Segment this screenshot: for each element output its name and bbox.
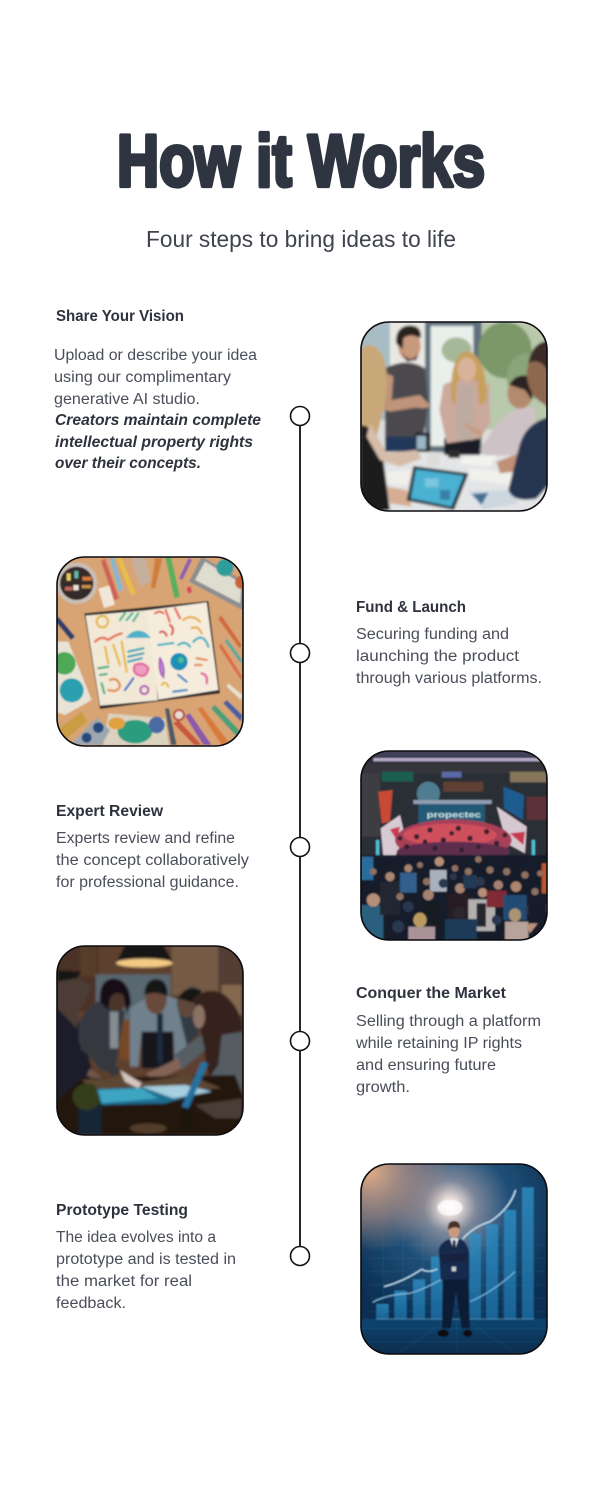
- description: conquer the market: and ensuring future: [356, 1057, 496, 1074]
- description: share your vision: Upload or describe your idea: [54, 347, 257, 364]
- description: conquer the market: [355, 1013, 541, 1096]
- photo: crowd at a product launch event: propectec: [427, 809, 481, 819]
- description: prototype testing: The idea evolves into a: [56, 1229, 216, 1246]
- description: fund and launch: Securing funding and: [356, 626, 509, 643]
- description: prototype testing: the market for real: [56, 1273, 192, 1290]
- description: fund and launch: through various platforms.: [356, 670, 542, 687]
- timeline node 5: [290, 1246, 310, 1266]
- description: expert review: for professional guidance.: [56, 874, 239, 891]
- description: share your vision: over their concepts.: [55, 455, 201, 472]
- description: conquer the market: Selling through a platform: [356, 1013, 541, 1030]
- description: prototype testing: prototype and is tested in: [56, 1251, 236, 1268]
- description: prototype testing: [56, 1229, 236, 1312]
- text block: expert review: [56, 803, 249, 891]
- timeline: [290, 406, 310, 1266]
- description: fund and launch: [356, 626, 542, 687]
- description: conquer the market: while retaining IP rights: [355, 1035, 522, 1052]
- description: share your vision: Creators maintain complete: [55, 412, 261, 429]
- heading: prototype testing: Prototype Testing: [56, 1202, 188, 1219]
- description: conquer the market: growth.: [356, 1079, 410, 1096]
- text block: conquer the market: [355, 985, 541, 1096]
- timeline node 3: [290, 838, 310, 856]
- description: expert review: the concept collaboratively: [56, 852, 249, 869]
- text block: share your vision: [54, 308, 261, 472]
- photo: crowd at a product launch event: [360, 750, 548, 941]
- subtitle: Four steps to bring ideas to life: [146, 226, 456, 252]
- description: fund and launch: launching the product: [356, 648, 520, 665]
- timeline node 4: [290, 1032, 310, 1050]
- description: share your vision: [54, 347, 261, 472]
- title: How it Works: [117, 121, 485, 202]
- heading: fund and launch: Fund & Launch: [356, 599, 466, 616]
- description: share your vision: generative AI studio.: [54, 391, 200, 408]
- heading: conquer the market: Conquer the Market: [356, 985, 507, 1002]
- description: expert review: Experts review and refine: [56, 830, 235, 847]
- text block: fund and launch: [356, 599, 542, 687]
- photo: team meeting around a table: [360, 321, 548, 512]
- photo: open sketchbook with art supplies: [56, 556, 244, 747]
- description: expert review: [56, 830, 249, 891]
- heading: share your vision: Share Your Vision: [56, 308, 184, 325]
- text block: prototype testing: [56, 1202, 236, 1312]
- timeline node 2: [290, 644, 310, 662]
- photo: team working over a touch table: [56, 945, 244, 1136]
- heading: expert review: Expert Review: [56, 803, 164, 820]
- description: share your vision: using our complimentary: [54, 369, 231, 386]
- description: share your vision: intellectual property rights: [55, 434, 253, 451]
- timeline node 1: [290, 406, 310, 426]
- photo: businessman in front of growth chart: [360, 1163, 548, 1355]
- description: prototype testing: feedback.: [56, 1295, 126, 1312]
